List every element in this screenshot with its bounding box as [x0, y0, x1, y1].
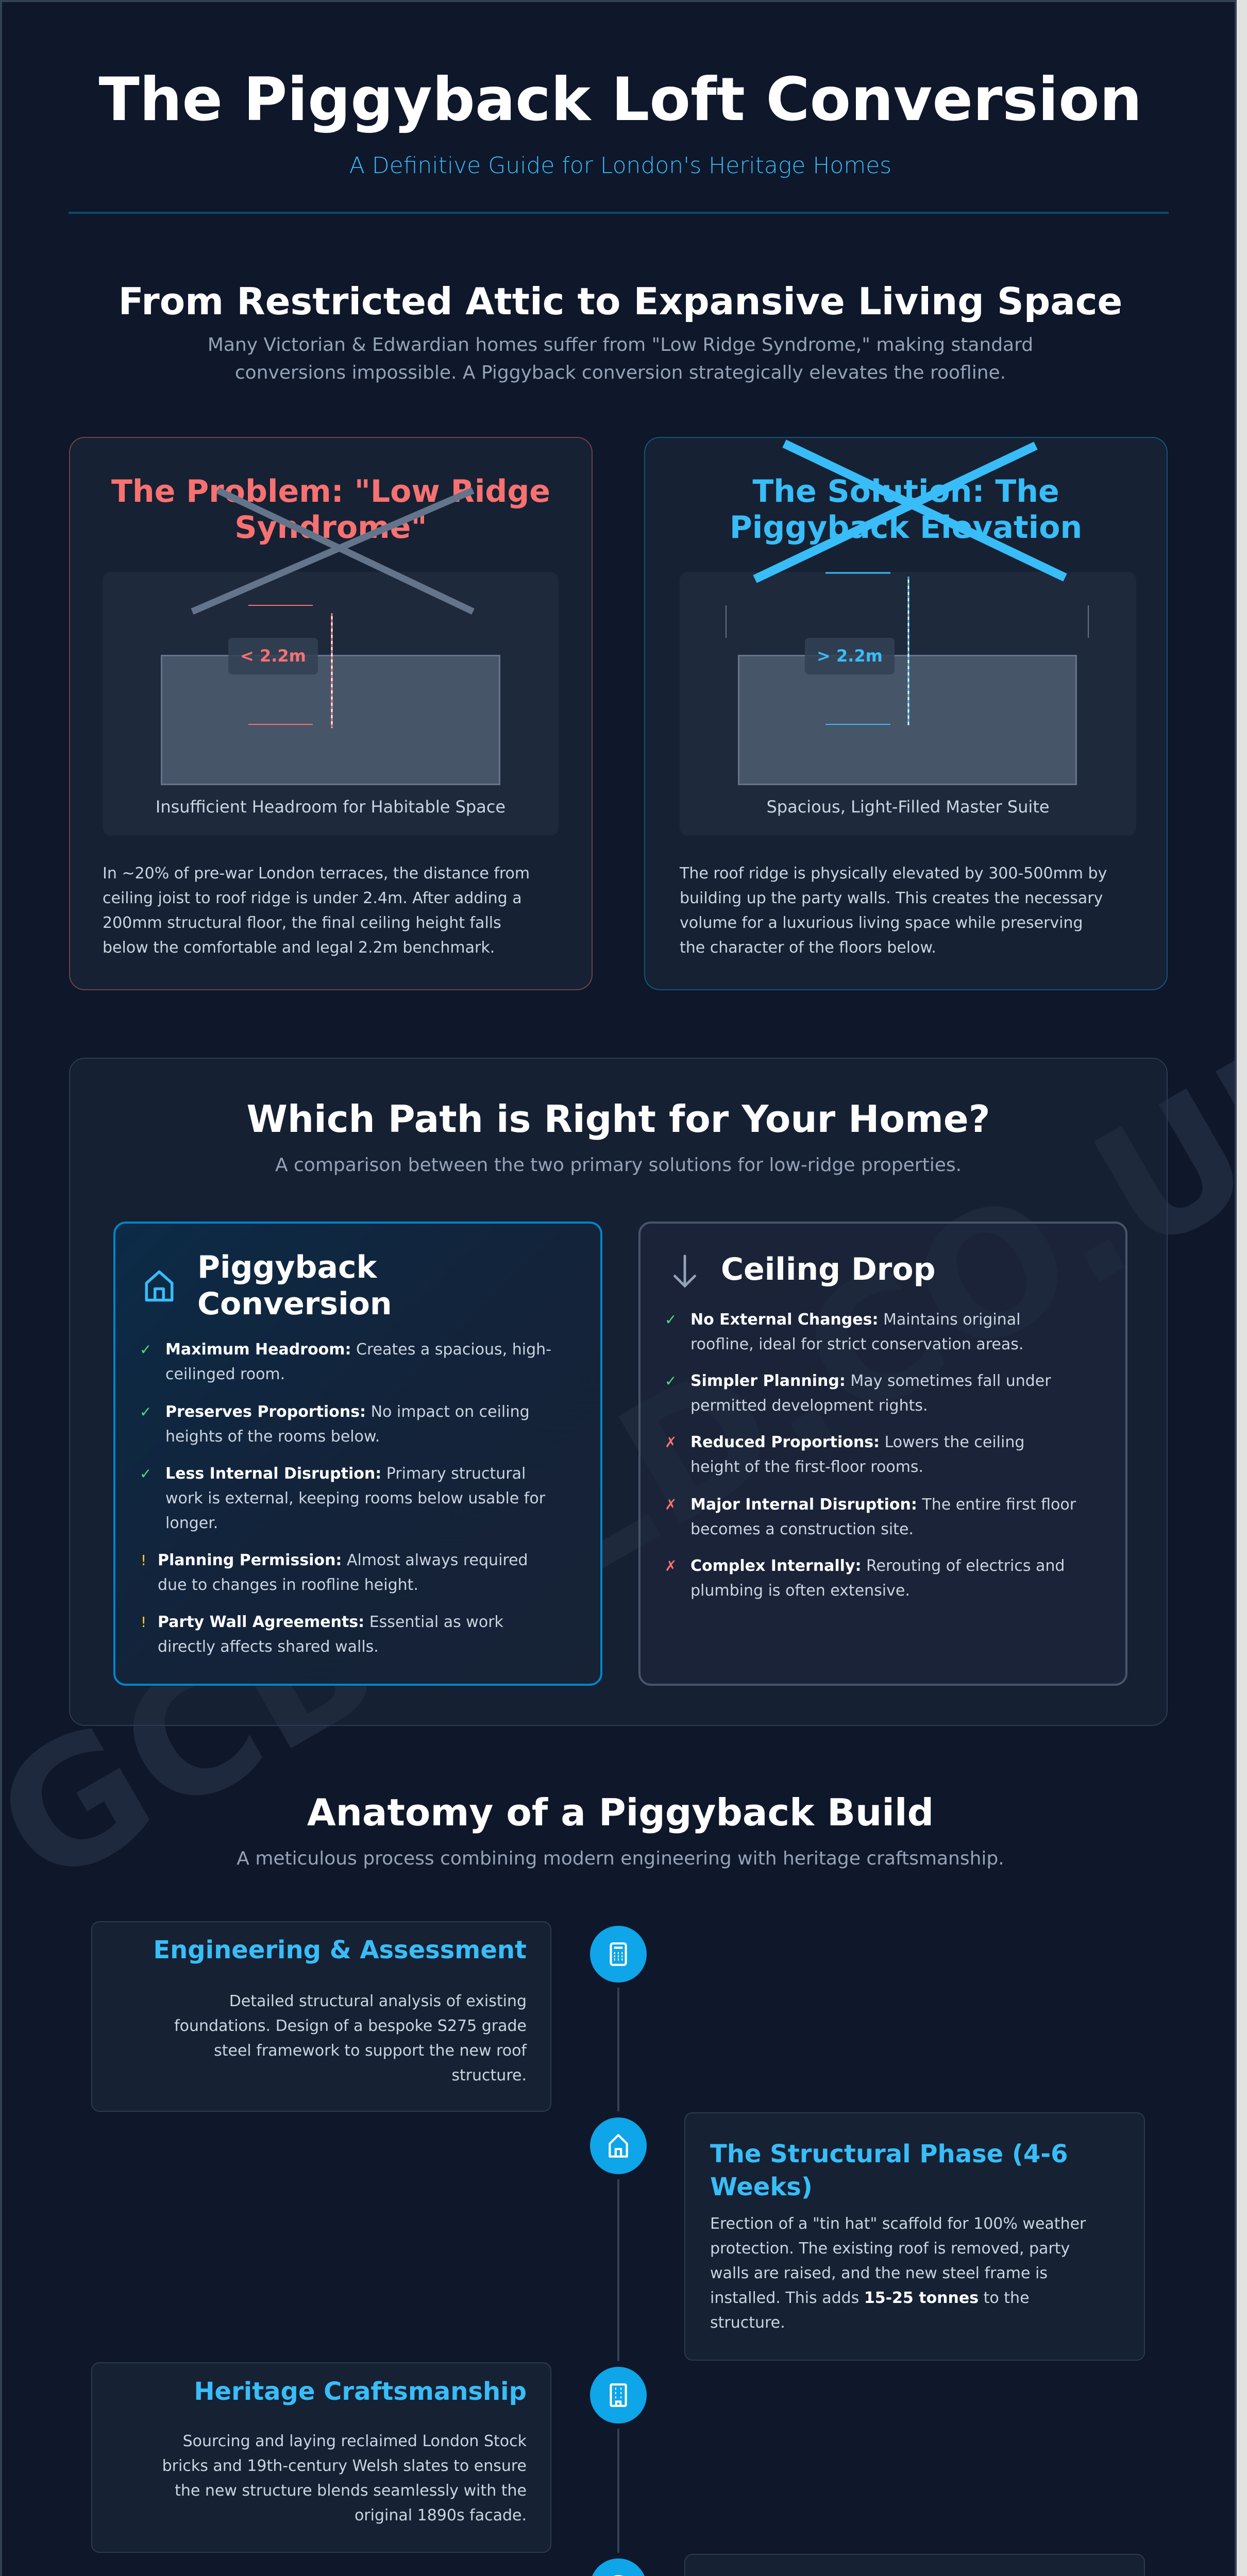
problem title: [111, 473, 550, 546]
timeline step 2: structural: Weeks): [710, 2173, 813, 2201]
caption: Spacious, Light-Filled Master Suite: [766, 797, 1050, 817]
problem text: [103, 865, 530, 957]
list: piggyback pros/cons: directly affects shared walls.: [158, 1638, 379, 1656]
list: ceiling drop pros/cons: ✗: [665, 1434, 677, 1451]
label: less than 2.2m: < 2.2m: [240, 646, 306, 666]
timeline step 2: structural: The Structural Phase (4-6: [710, 2140, 1068, 2168]
solution text: The roof ridge is physically elevated by 300-500mm by: [680, 865, 1107, 883]
list: piggyback pros/cons: Less Internal Disruption: Primary structural: [165, 1465, 526, 1483]
subheading: anatomy: A meticulous process combining modern engineering with heritage craftsmanship.: [237, 1848, 1004, 1869]
icon: roof cross: [191, 487, 475, 615]
solution diagram: [680, 572, 1136, 836]
timeline step 2: structural: [684, 2112, 1145, 2361]
room: [161, 655, 500, 785]
timeline step 1: engineering: [91, 1921, 551, 2112]
list: ceiling drop pros/cons: ✓: [665, 1372, 677, 1389]
heading: Which Path is Right for Your Home?: [246, 1097, 990, 1141]
icon: arrow down: [673, 1255, 696, 1288]
timeline step 2: structural: Erection of a "tin hat" scaffold for 100% weather: [710, 2215, 1086, 2233]
label: more than 2.2m: > 2.2m: [817, 646, 883, 666]
problem text: below the comfortable and legal 2.2m benchmark.: [103, 939, 495, 957]
list: ceiling drop pros/cons: permitted development rights.: [690, 1397, 928, 1415]
list: piggyback pros/cons: !: [141, 1552, 146, 1569]
list: piggyback pros/cons: ✓: [140, 1341, 151, 1358]
problem diagram: [103, 572, 559, 836]
icon: house: [145, 1270, 173, 1301]
list: ceiling drop pros/cons: [665, 1311, 1076, 1600]
solution text: the character of the floors below.: [680, 939, 936, 957]
label: less than 2.2m: [228, 638, 318, 674]
timeline step 2: structural: protection. The existing roof is removed, party: [710, 2240, 1070, 2258]
timeline line: [617, 1988, 619, 2553]
timeline step 3: heritage: the new structure blends seamlessly with the: [175, 2482, 527, 2500]
list: ceiling drop pros/cons: Simpler Planning: May sometimes fall under: [690, 1372, 1051, 1390]
title: Piggyback: [197, 1249, 377, 1285]
subheading: A comparison between the two primary solutions for low-ridge properties.: [275, 1155, 962, 1176]
heading: anatomy: Anatomy of a Piggyback Build: [307, 1791, 934, 1834]
room: [738, 655, 1077, 785]
list: ceiling drop pros/cons: height of the first-floor rooms.: [690, 1458, 923, 1476]
solution text: [679, 865, 1107, 957]
icon: calculator: [590, 1926, 647, 1982]
problem text: 200mm structural floor, the final ceiling height falls: [103, 914, 501, 932]
problem text: In ~20% of pre-war London terraces, the distance from: [103, 865, 530, 883]
list: piggyback pros/cons: Preserves Proportions: No impact on ceiling: [165, 1403, 530, 1421]
label: more than 2.2m: [805, 638, 895, 674]
icon: building: [590, 2367, 647, 2424]
problem text: ceiling joist to roof ridge is under 2.4m. After adding a: [103, 889, 522, 907]
list: piggyback pros/cons: longer.: [165, 1514, 218, 1532]
list: ceiling drop pros/cons: becomes a construction site.: [690, 1520, 914, 1538]
list: ceiling drop pros/cons: plumbing is often extensive.: [690, 1582, 910, 1600]
list: ceiling drop pros/cons: Complex Internally: Rerouting of electrics and: [690, 1557, 1065, 1575]
list: ceiling drop pros/cons: Reduced Proportions: Lowers the ceiling: [690, 1433, 1024, 1451]
list: piggyback pros/cons: work is external, keeping rooms below usable for: [165, 1489, 545, 1507]
list: piggyback pros/cons: !: [141, 1614, 146, 1631]
problem title: Syndrome": [234, 510, 427, 546]
solution text: building up the party walls. This creates the necessary: [680, 889, 1103, 907]
list: ceiling drop pros/cons: Major Internal Disruption: The entire first floor: [690, 1496, 1076, 1514]
list: ceiling drop pros/cons: No External Changes: Maintains original: [690, 1311, 1020, 1329]
timeline step 1: engineering: foundations. Design of a bespoke S275 grade: [174, 2017, 527, 2035]
intro paragraph: conversions impossible. A Piggyback conversion strategically elevates the roofline.: [235, 362, 1006, 383]
list: ceiling drop pros/cons: roofline, ideal for strict conservation areas.: [690, 1335, 1023, 1353]
solution title: The Solution: The: [752, 473, 1059, 510]
problem title: The Problem: "Low Ridge: [111, 473, 550, 510]
solution title: [730, 473, 1082, 546]
timeline step 2: structural: walls are raised, and the new steel frame is: [710, 2264, 1048, 2282]
list: piggyback pros/cons: ceilinged room.: [165, 1365, 285, 1383]
timeline step 1: engineering: structure.: [451, 2066, 527, 2084]
timeline step 3: heritage: Heritage Craftsmanship: [194, 2377, 527, 2406]
solution title: Piggyback Elevation: [730, 510, 1082, 546]
panel: problem: [69, 437, 593, 990]
icon: raised roof cross: [753, 439, 1067, 583]
timeline step 1: engineering: Detailed structural analysis of existing: [229, 1992, 527, 2010]
panel: solution: [644, 437, 1168, 990]
list: piggyback pros/cons: due to changes in roofline height.: [158, 1576, 418, 1594]
timeline step 3: heritage: bricks and 19th-century Welsh slates to ensure: [162, 2457, 527, 2475]
timeline step 1: engineering: Engineering & Assessment: [153, 1936, 527, 1964]
title: The Piggyback Loft Conversion: [99, 65, 1142, 134]
title: Ceiling Drop: [721, 1251, 936, 1287]
subtitle: A Definitive Guide for London's Heritage Homes: [349, 152, 891, 179]
icon: home: [590, 2117, 647, 2174]
list: ceiling drop pros/cons: ✗: [665, 1557, 677, 1574]
solution text: volume for a luxurious living space while preserving: [680, 914, 1083, 932]
list: piggyback pros/cons: ✓: [140, 1465, 151, 1482]
timeline step 3: heritage: Sourcing and laying reclaimed London Stock: [183, 2432, 527, 2450]
panel: which path: [69, 1058, 1168, 1726]
icon: check circle: [590, 2558, 647, 2576]
list: piggyback pros/cons: Party Wall Agreements: Essential as work: [158, 1613, 503, 1631]
title: Conversion: [197, 1286, 392, 1322]
timeline step 3: heritage: original 1890s facade.: [355, 2506, 527, 2524]
caption: Insufficient Headroom for Habitable Space: [156, 797, 505, 817]
timeline step 2: structural: installed. This adds 15-25 tonnes to the: [710, 2289, 1030, 2307]
list: ceiling drop pros/cons: ✓: [665, 1311, 677, 1328]
card: ceiling drop: [638, 1222, 1127, 1686]
timeline step 4: completion: [684, 2554, 1145, 2576]
intro paragraph: [208, 334, 1033, 383]
card: piggyback conversion: [113, 1222, 602, 1686]
list: piggyback pros/cons: ✓: [140, 1403, 151, 1420]
list: piggyback pros/cons: Planning Permission: Almost always required: [158, 1551, 528, 1569]
list: piggyback pros/cons: heights of the rooms below.: [165, 1428, 380, 1446]
intro paragraph: Many Victorian & Edwardian homes suffer from "Low Ridge Syndrome," making standard: [208, 334, 1033, 355]
timeline step 3: heritage: [91, 2362, 551, 2553]
list: piggyback pros/cons: Maximum Headroom: Creates a spacious, high-: [165, 1341, 551, 1359]
timeline step 1: engineering: steel framework to support the new roof: [214, 2042, 527, 2060]
list: ceiling drop pros/cons: ✗: [665, 1496, 677, 1513]
heading: restricted attic: From Restricted Attic to Expansive Living Space: [119, 280, 1122, 323]
list: piggyback pros/cons: [140, 1341, 551, 1656]
timeline step 2: structural: structure.: [710, 2314, 785, 2332]
title: [197, 1249, 392, 1322]
